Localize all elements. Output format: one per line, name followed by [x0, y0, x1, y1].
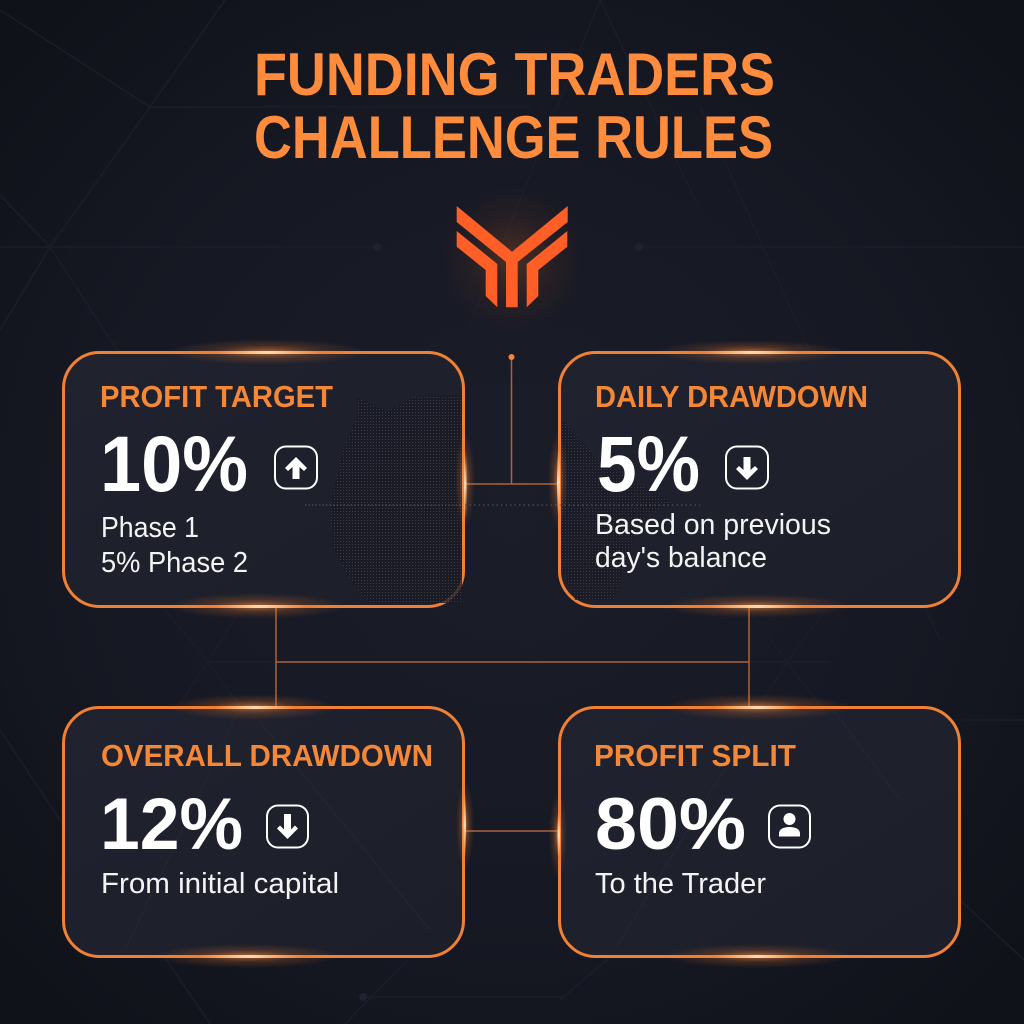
card: profit split — [549, 694, 960, 968]
dotted map texture — [562, 420, 672, 600]
dotted map texture — [330, 395, 462, 603]
description: 5% Phase 2 — [101, 547, 248, 579]
icon: down arrow — [726, 446, 768, 488]
title: FUNDING TRADERS — [254, 41, 775, 108]
glow accents — [152, 694, 474, 968]
glow accents — [548, 340, 852, 618]
heading: DAILY DRAWDOWN — [595, 379, 868, 414]
description: Phase 1 — [101, 512, 199, 544]
dotted node line — [305, 504, 462, 506]
glow accents — [167, 339, 475, 619]
description: day's balance — [595, 542, 767, 574]
description: To the Trader — [595, 868, 767, 900]
glow accents — [549, 694, 852, 968]
icon: down arrow — [267, 806, 308, 848]
faint card lines — [615, 712, 900, 950]
heading: OVERALL DRAWDOWN — [101, 738, 433, 773]
connectors — [276, 354, 749, 831]
description — [595, 509, 831, 574]
dotted node line — [465, 504, 700, 506]
title: CHALLENGE RULES — [254, 104, 773, 171]
icon: up arrow — [275, 446, 317, 488]
icon: person — [769, 806, 810, 848]
value: 12% — [100, 784, 243, 865]
card: profit target — [64, 339, 475, 619]
heading: PROFIT TARGET — [100, 379, 333, 414]
title — [254, 41, 775, 171]
description: From initial capital — [101, 868, 339, 900]
logo — [440, 186, 584, 330]
value: 80% — [595, 784, 746, 865]
value: 5% — [597, 419, 700, 508]
description — [101, 512, 248, 579]
description: Based on previous — [595, 509, 831, 541]
value: 10% — [100, 419, 248, 508]
faint card lines — [125, 712, 430, 950]
card: daily drawdown — [465, 340, 960, 618]
heading: PROFIT SPLIT — [594, 738, 796, 773]
card: overall drawdown — [64, 694, 474, 968]
